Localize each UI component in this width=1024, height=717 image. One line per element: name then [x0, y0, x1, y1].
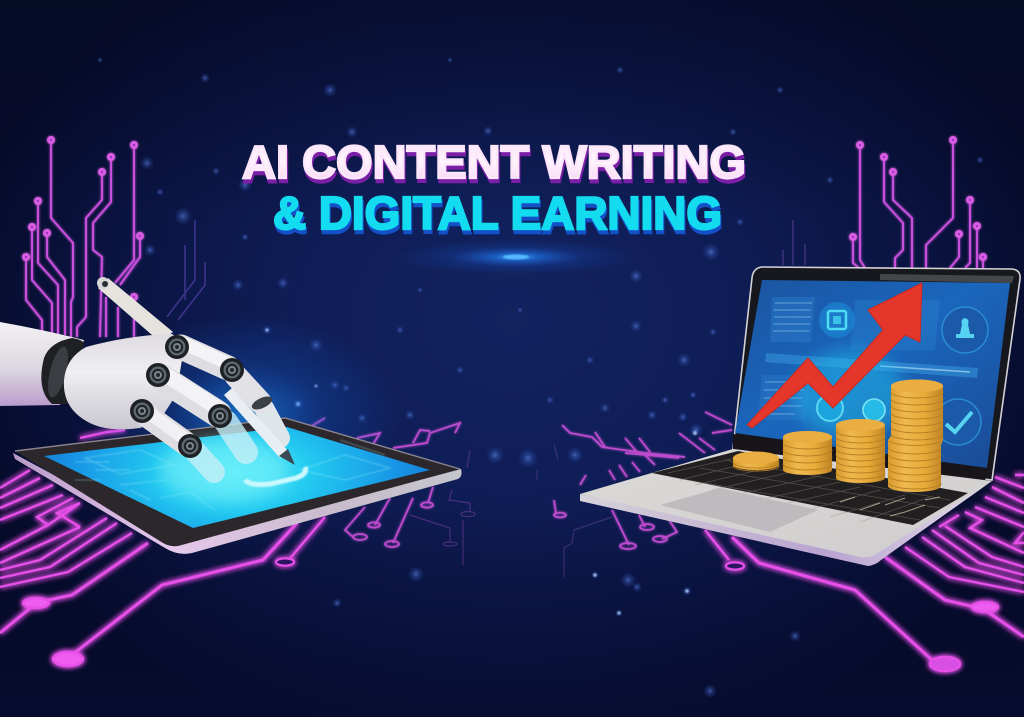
tablet body: [15, 418, 460, 546]
circuit: faint laptop traces: [537, 445, 612, 577]
display interface: [758, 297, 988, 445]
circuit: tablet right cluster: [310, 418, 460, 547]
display glare: [880, 274, 1014, 283]
circuit: faint tablet traces: [410, 450, 475, 565]
laptop base side: [580, 481, 992, 566]
coin stack two: [783, 431, 832, 475]
tablet top rim: [15, 418, 460, 469]
title line one: AI CONTENT WRITING: [242, 136, 746, 188]
finger two: [146, 363, 246, 452]
circuit: bottom right: [705, 475, 1024, 671]
pen lower: [224, 388, 295, 465]
tablet screen interface: [75, 440, 390, 510]
robot hand: [0, 277, 295, 472]
chip icon: [819, 302, 855, 338]
title glow flare: [396, 239, 636, 275]
coin stack four: [888, 380, 943, 492]
node: [23, 598, 49, 608]
finger three: [130, 399, 214, 472]
coin stack one: [733, 452, 779, 471]
title: [242, 136, 747, 243]
coin stacks: [733, 380, 943, 492]
finger one: [165, 335, 280, 438]
circuit: top left: [24, 138, 142, 337]
glow behind hand: [90, 315, 400, 515]
tablet side edge: [13, 453, 462, 554]
tablet screen: [44, 427, 430, 528]
node: [930, 657, 960, 671]
circuit: laptop left cluster: [554, 412, 732, 549]
round icon hex: [863, 399, 885, 421]
growth arrow: [747, 283, 922, 428]
title line two: & DIGITAL EARNING: [274, 191, 723, 243]
screen bright glow: [160, 438, 290, 502]
keyboard: [652, 451, 968, 525]
nodes: [850, 138, 986, 260]
node: [726, 562, 744, 570]
bar mid: [765, 353, 978, 378]
laptop lid: [733, 267, 1020, 480]
circuit: faint top right: [783, 220, 805, 265]
text panel top: [770, 297, 815, 342]
circuit: bottom left: [0, 430, 325, 666]
chess icon: [942, 307, 988, 353]
palm: [64, 334, 183, 429]
screen glow: [795, 350, 905, 440]
round icon shield: [817, 395, 843, 421]
node: [972, 602, 998, 612]
title line two: & DIGITAL EARNING: [273, 187, 722, 239]
bright sparkles: [266, 328, 697, 615]
laptop display: [735, 280, 1010, 468]
trackpad: [660, 488, 818, 532]
node: [53, 652, 83, 666]
particle field: [97, 57, 984, 698]
circuit: faint top left: [167, 220, 205, 320]
title line one: AI CONTENT WRITING: [243, 140, 747, 192]
robot arm: [0, 322, 84, 406]
hinge band: [733, 434, 987, 482]
tablet: [13, 418, 462, 554]
nodes: [24, 138, 142, 300]
laptop: [580, 267, 1020, 566]
check icon: [935, 399, 981, 445]
panel behind arrow: [850, 300, 940, 350]
coin stack three: [836, 419, 885, 483]
wrist joint: [41, 338, 84, 404]
laptop base: [580, 449, 992, 557]
tablet screen U icon: [245, 467, 306, 484]
circuit: top right: [850, 138, 986, 268]
node: [276, 558, 294, 566]
pen upper: [97, 277, 173, 342]
text panel bottom: [758, 375, 810, 420]
